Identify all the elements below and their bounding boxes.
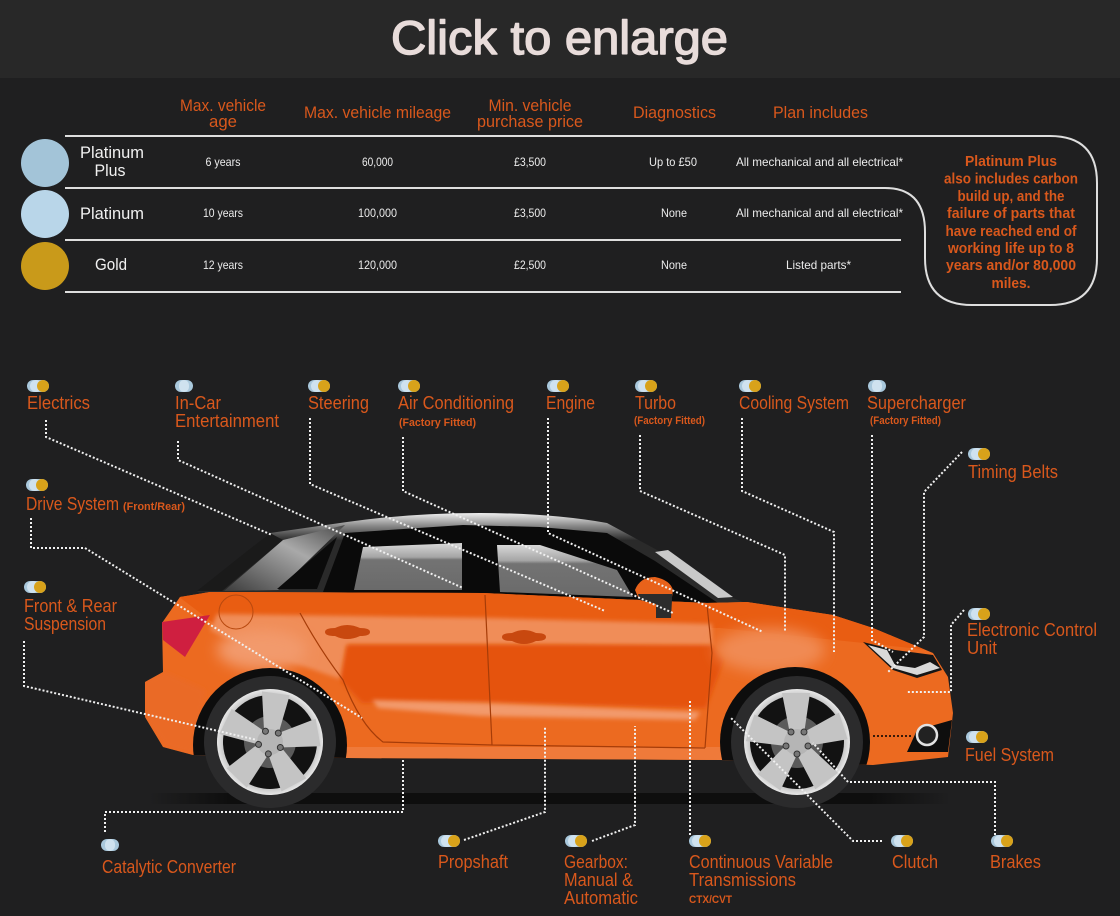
label: Propshaft [438, 835, 508, 872]
title: Click to enlarge [391, 11, 728, 64]
door shut lines [300, 595, 712, 748]
rear door handle [325, 625, 370, 639]
label: Engine: Engine [546, 393, 595, 413]
label: Clutch [891, 835, 938, 872]
label: Clutch: Clutch [892, 852, 938, 872]
Platinum Plus callout text: have reached end of [946, 224, 1077, 240]
windscreen highlight [655, 550, 733, 598]
label: Catalytic Converter: Catalytic Converter [102, 857, 236, 877]
plan row: Gold [21, 242, 851, 290]
tail light [162, 615, 210, 657]
label: Continuous Variable Transmissions [689, 835, 833, 906]
plan row: Platinum: 10 years [203, 206, 243, 220]
column headings: age [209, 112, 237, 131]
plan row: Platinum: None [661, 206, 687, 220]
label: Gearbox: Gearbox: [564, 852, 628, 872]
spoiler [197, 533, 283, 591]
plan row: Platinum Plus: Up to £50 [649, 155, 697, 169]
roof and pillars [197, 513, 748, 604]
label: Electronic Control Unit [967, 608, 1097, 658]
label: Front and Rear Suspension [24, 581, 117, 634]
column headings: Max. vehicle [180, 96, 266, 115]
plan row: Platinum Plus: 6 years [206, 155, 240, 169]
label: Electrics: Electrics [27, 393, 90, 413]
label: Gearbox: Manual & [564, 870, 633, 890]
label: Air Conditioning: (Factory Fitted) [399, 417, 476, 429]
label: Cooling System: Cooling System [739, 393, 849, 413]
plan row: Platinum: Platinum [80, 204, 144, 223]
label: Brakes: Brakes [990, 852, 1041, 872]
plan row: Platinum Plus: Plus [94, 161, 126, 180]
headlight [863, 642, 942, 678]
plan row: Gold: £2,500 [514, 258, 546, 272]
front wheel [731, 676, 863, 808]
central door panel [340, 645, 724, 708]
label: Timing Belts [968, 448, 1058, 482]
C-pillar [224, 525, 345, 591]
plan row: Gold: None [661, 258, 687, 272]
car body [145, 592, 953, 765]
column headings: purchase price [477, 112, 583, 131]
plan row: Gold: 120,000 [358, 258, 397, 272]
plan row: Gold: 12 years [203, 258, 243, 272]
plan row: Platinum: 100,000 [358, 206, 397, 220]
label: Continuous Variable Transmissions: Transmissions [689, 870, 796, 890]
Platinum Plus callout text: working life up to 8 [947, 241, 1074, 257]
side glass [323, 525, 718, 603]
Platinum Plus callout text [944, 154, 1078, 292]
column headings: Diagnostics [633, 103, 716, 122]
lower body streak [372, 700, 700, 720]
label: Timing Belts: Timing Belts [968, 462, 1058, 482]
headlight chrome [868, 645, 940, 675]
fuel cap [219, 595, 253, 629]
comparison table [21, 96, 1097, 305]
rear wheel arch [193, 668, 347, 758]
Platinum Plus callout text: years and/or 80,000 [946, 258, 1076, 274]
label: Steering: Steering [308, 393, 369, 413]
label: Front and Rear Suspension: Front & Rear [24, 596, 117, 616]
front wheel arch [720, 667, 870, 765]
label: Continuous Variable Transmissions: Continuous Variable [689, 852, 833, 872]
Platinum Plus callout text: failure of parts that [947, 206, 1075, 222]
label: Supercharger [867, 380, 966, 427]
label: Air Conditioning [398, 380, 514, 429]
label: Engine [546, 380, 595, 413]
label: In-Car Entertainment: In-Car [175, 393, 221, 413]
label: Propshaft: Propshaft [438, 852, 508, 872]
rear quarter window [277, 537, 337, 589]
plan row: Platinum: All mechanical and all electrical* [736, 206, 903, 220]
label: Brakes [990, 835, 1041, 872]
Platinum Plus callout text: build up, and the [958, 189, 1064, 205]
label: Turbo: Turbo [635, 393, 676, 413]
plan row: Gold: Listed parts* [786, 258, 851, 272]
plan row: Platinum Plus: £3,500 [514, 155, 546, 169]
door mirror [635, 577, 673, 597]
light shoulder band [210, 614, 712, 680]
label: Air Conditioning: Air Conditioning [398, 393, 514, 413]
label: Gearbox [564, 835, 638, 908]
fog lamp housing [907, 720, 952, 752]
sill highlight [345, 747, 725, 760]
label: Steering [308, 380, 369, 413]
front fender highlight [715, 628, 825, 672]
label: Cooling System [739, 380, 849, 413]
label: Front and Rear Suspension: Suspension [24, 614, 106, 634]
label: Supercharger: Supercharger [867, 393, 966, 413]
mirror underside and stem [638, 594, 672, 618]
Platinum Plus callout text: miles. [992, 276, 1030, 292]
label: Electronic Control Unit: Electronic Control [967, 620, 1097, 640]
car illustration [140, 513, 960, 822]
label: Electrics [27, 380, 90, 413]
label: Fuel System: Fuel System [965, 745, 1054, 765]
column headings [180, 96, 868, 131]
label: Continuous Variable Transmissions: CTX/CVT [689, 894, 732, 906]
plan row: Platinum Plus: 60,000 [362, 155, 393, 169]
label: In-Car Entertainment: Entertainment [175, 411, 279, 431]
label: Turbo: (Factory Fitted) [634, 415, 705, 427]
Platinum Plus callout text: Platinum Plus [965, 154, 1057, 170]
table rules and callout outline [65, 136, 1097, 305]
fog lamp [917, 725, 937, 745]
label: Catalytic Converter [101, 839, 236, 877]
plan row: Platinum: £3,500 [514, 206, 546, 220]
column headings: Min. vehicle [488, 96, 572, 115]
plan row: Platinum Plus [21, 139, 903, 187]
label: Fuel System [965, 731, 1054, 765]
upper body band [170, 590, 930, 650]
leader lines [24, 418, 995, 841]
label: Drive System: (Front/Rear) [123, 501, 185, 513]
plan row: Gold: Gold [95, 255, 127, 274]
plan row: Platinum [21, 190, 903, 238]
header band [0, 0, 1120, 78]
rear quarter highlight [217, 630, 307, 670]
label: Turbo [634, 380, 705, 427]
label: Drive System: Drive System [26, 494, 119, 514]
front window reflection [497, 545, 633, 597]
front door handle [502, 630, 546, 644]
rear bumper [145, 672, 192, 755]
Platinum Plus callout text: also includes carbon [944, 172, 1078, 188]
rear window reflection [354, 543, 462, 590]
label: In-Car Entertainment [175, 380, 279, 431]
plan row: Platinum Plus: All mechanical and all electrical* [736, 155, 903, 169]
column headings: Max. vehicle mileage [304, 103, 451, 122]
column headings: Plan includes [773, 103, 868, 122]
ground shadow [150, 793, 950, 804]
rear wheel [195, 667, 345, 817]
plan row: Platinum Plus: Platinum [80, 143, 144, 162]
label: Electronic Control Unit: Unit [967, 638, 997, 658]
label: Supercharger: (Factory Fitted) [870, 415, 941, 427]
label: Gearbox: Automatic [564, 888, 638, 908]
label: Drive System [26, 479, 185, 514]
